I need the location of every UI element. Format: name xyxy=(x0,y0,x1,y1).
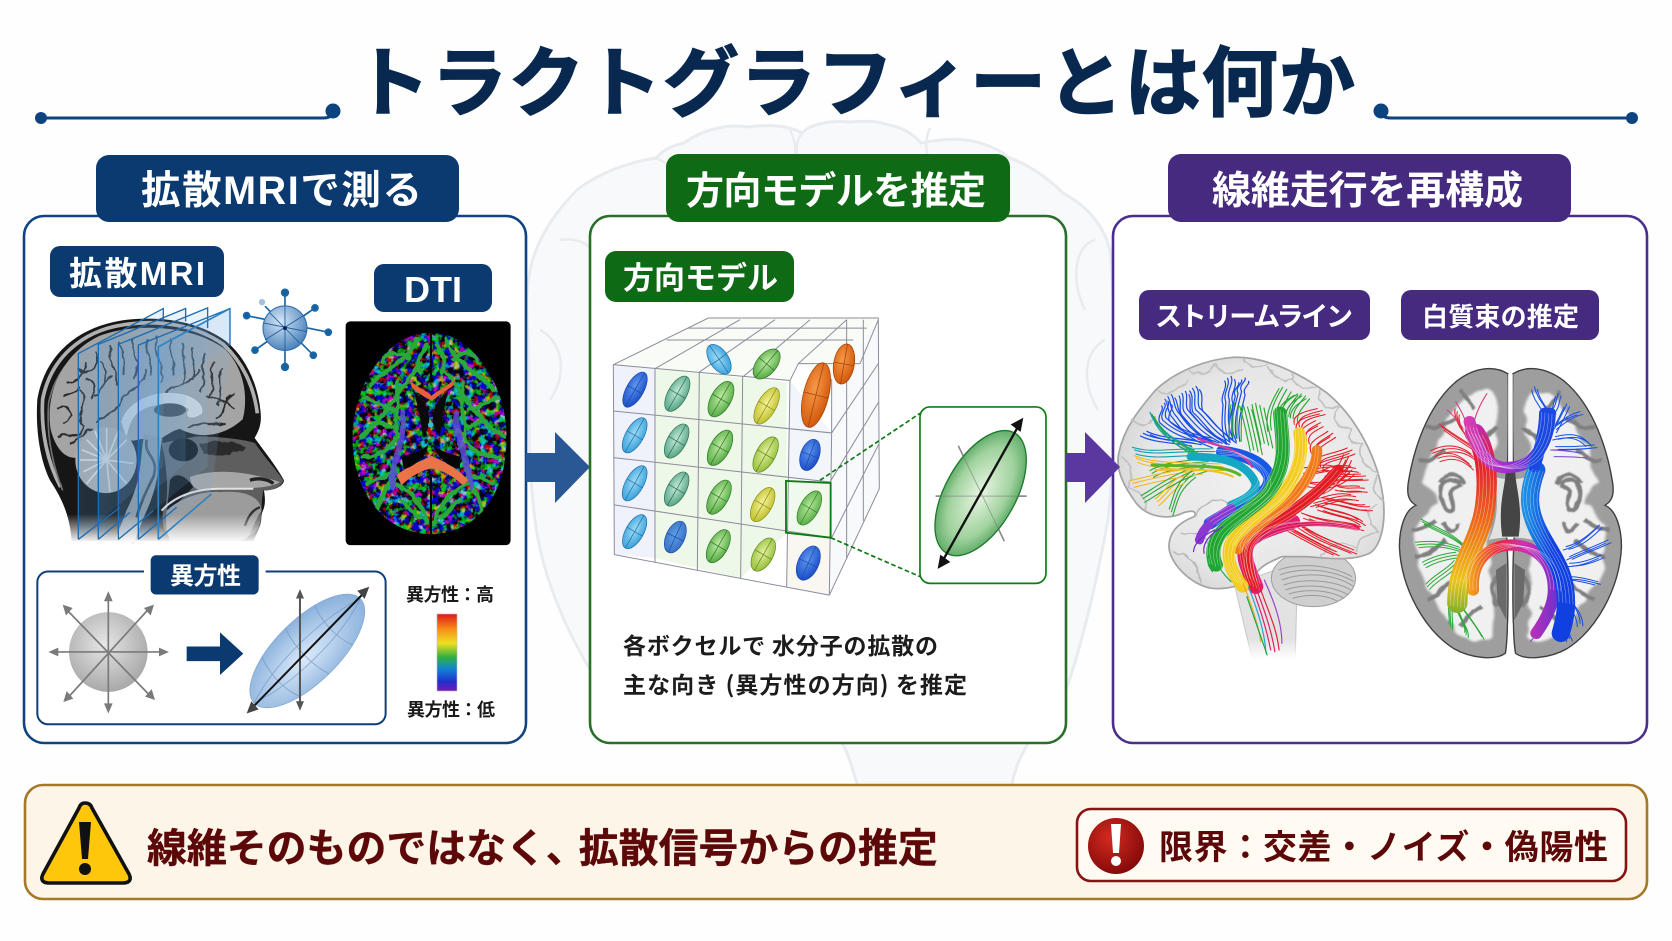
label: streamlines xyxy=(1139,290,1370,340)
axial hemispheres xyxy=(1399,369,1621,658)
selected voxel highlight xyxy=(786,481,831,538)
dashed zoom lines xyxy=(820,413,920,577)
caveat main text: 線維そのものではなく、拡散信号からの推定 xyxy=(147,817,938,874)
axial fine fibres xyxy=(1416,387,1611,642)
anisotropy comparison box xyxy=(37,555,386,726)
slice planes xyxy=(78,308,230,539)
label: streamlines: ストリームライン xyxy=(1155,302,1353,332)
explanatory text xyxy=(623,627,967,700)
panel: diffusion MRI xyxy=(24,155,526,743)
anisotropy label text: 異方性 xyxy=(170,563,241,590)
heading: reconstruct fiber tracts: 線維走行を再構成 xyxy=(1212,170,1523,213)
inset: enlarged ellipsoid xyxy=(916,407,1046,583)
voxel grid cube xyxy=(613,318,879,595)
explanatory text: 各ボクセルで 水分子の拡散の xyxy=(623,627,938,661)
panel: fiber reconstruction xyxy=(1113,154,1647,743)
label: white-matter bundle estimate xyxy=(1401,290,1599,340)
bottom caveat banner xyxy=(25,785,1647,899)
bright strand highlights xyxy=(1204,407,1364,590)
heading: diffusion MRI measurement: 拡散MRIで測る xyxy=(141,169,422,213)
limitations callout xyxy=(1077,809,1626,881)
icon: exclamation circle xyxy=(1088,818,1144,874)
isotropic sphere xyxy=(48,591,169,713)
sagittal brain with rainbow streamlines xyxy=(1118,357,1384,659)
label: diffusion MRI xyxy=(50,246,224,297)
brainstem strands xyxy=(1193,527,1282,655)
thick rainbow bands xyxy=(1152,413,1357,587)
axial streamline bands xyxy=(1457,413,1566,633)
anisotropy colour legend xyxy=(406,581,495,722)
label: DTI: DTI xyxy=(404,269,462,310)
legend low label: 異方性：低 xyxy=(407,696,495,722)
axial strand highlights xyxy=(1450,412,1573,608)
anisotropic ellipsoid xyxy=(232,576,382,726)
MRI head with slice planes xyxy=(37,308,284,543)
heading: diffusion MRI measurement xyxy=(96,155,459,222)
panel: direction model xyxy=(590,154,1066,743)
label: direction model: 方向モデル xyxy=(623,261,778,296)
streamline fans xyxy=(1131,376,1372,556)
limitations text: 限界：交差・ノイズ・偽陽性 xyxy=(1159,820,1608,869)
label: white-matter bundle estimate: 白質束の推定 xyxy=(1422,302,1579,332)
anisotropy label xyxy=(151,555,259,595)
title: トラクトグラフィーとは何か xyxy=(354,22,1355,132)
legend colour bar xyxy=(437,614,457,691)
icon: warning triangle xyxy=(42,803,130,883)
voxel ellipsoids xyxy=(617,340,858,584)
title decoration: left rule xyxy=(35,104,340,124)
heading: estimate direction model: 方向モデルを推定 xyxy=(686,170,986,213)
sagittal brain silhouette xyxy=(1118,357,1384,659)
icon: diffusion sphere with spokes xyxy=(244,289,331,370)
axial brain with rainbow streamlines xyxy=(1399,369,1621,658)
heading: reconstruct fiber tracts xyxy=(1168,154,1571,222)
arrow: isotropic to anisotropic xyxy=(187,632,243,675)
explanatory text: 主な向き (異方性の方向) を推定 xyxy=(623,666,967,700)
legend high label: 異方性：高 xyxy=(406,581,494,607)
label: diffusion MRI: 拡散MRI xyxy=(69,255,205,292)
label: DTI xyxy=(374,264,492,312)
heading: estimate direction model xyxy=(666,154,1010,222)
title decoration: right rule xyxy=(1374,104,1638,124)
DTI colour-coded axial map xyxy=(346,321,511,545)
selected voxel with zoom inset xyxy=(786,407,1046,583)
watermark: faint brain behind panels xyxy=(527,121,1114,786)
label: direction model xyxy=(605,251,794,302)
arrow: step 1 to step 2 xyxy=(526,432,590,503)
arrow: step 2 to step 3 xyxy=(1066,432,1120,503)
